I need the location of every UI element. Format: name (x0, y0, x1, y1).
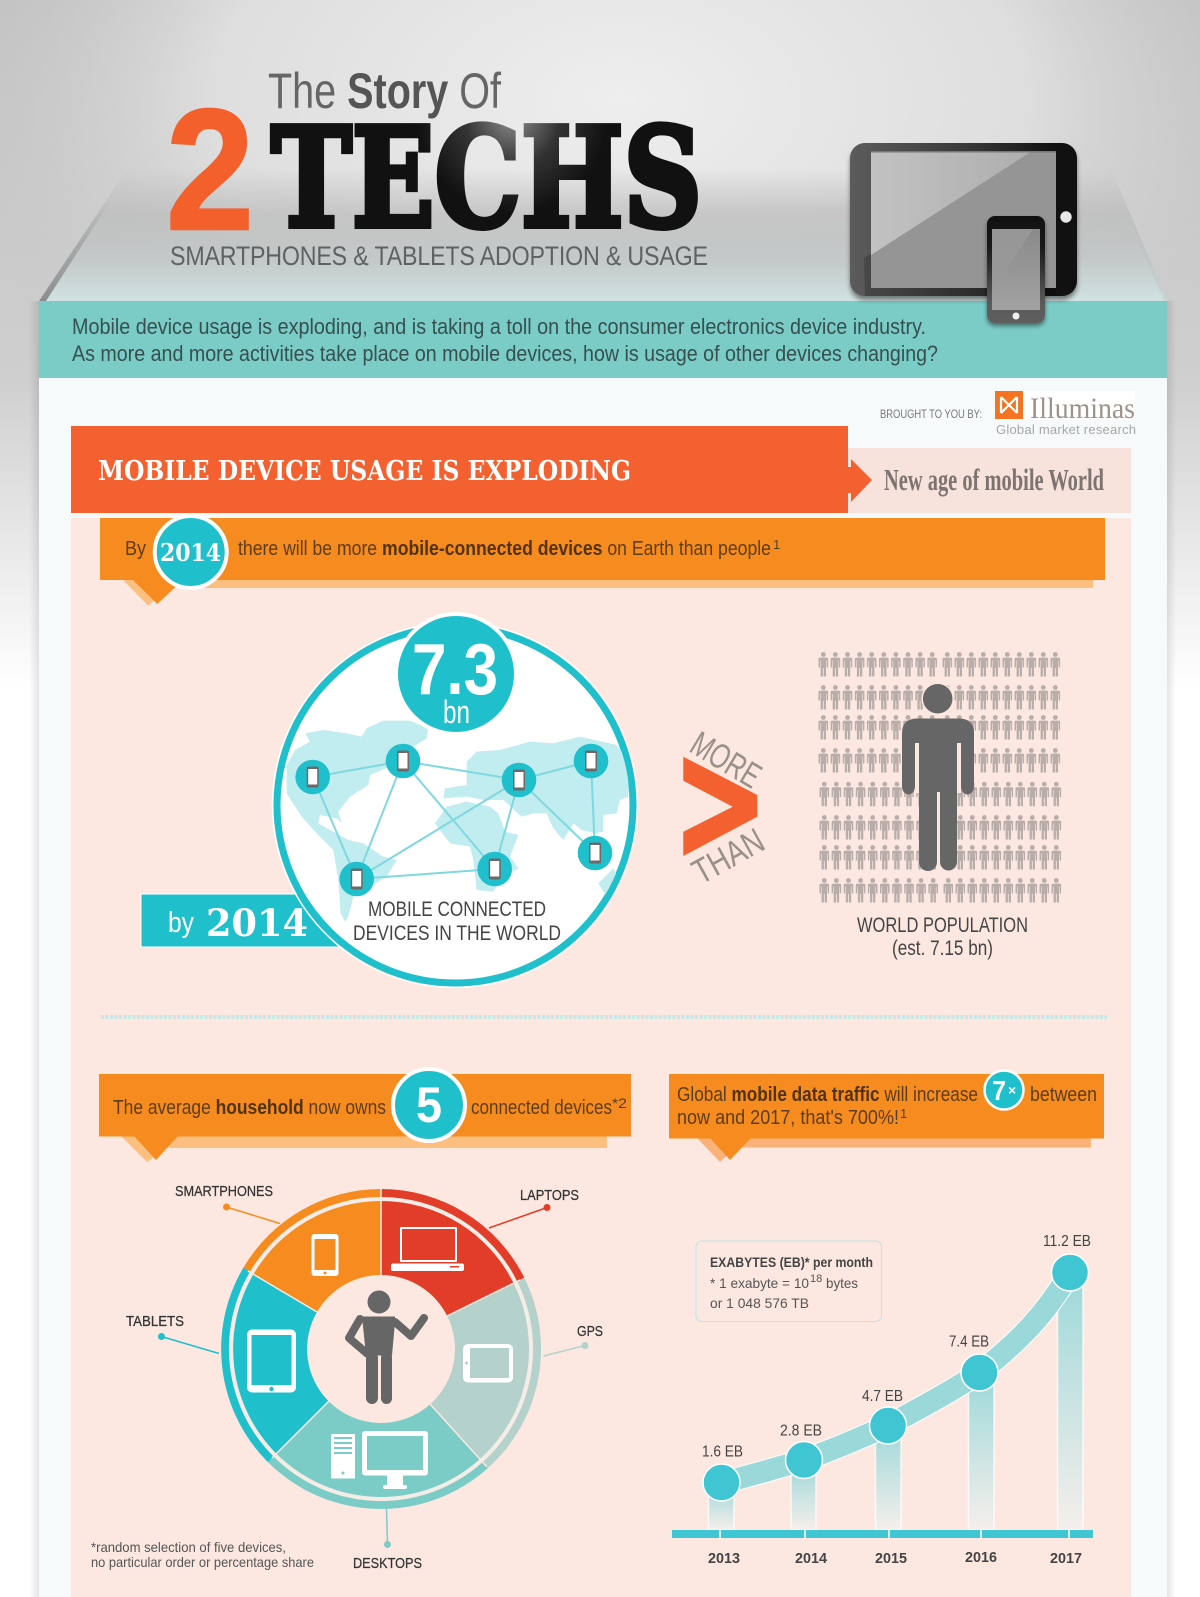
badge: 7.3 bn: bn (443, 694, 470, 730)
callout: household devices (99, 1069, 631, 1162)
world population pictogram: WORLD POPULATION (857, 914, 1028, 937)
numeral 2: 2 (166, 74, 254, 266)
sponsor credit: BROUGHT TO YOU BY: (880, 407, 982, 421)
exabytes legend: * 1 exabyte = 10 (710, 1275, 809, 1291)
callout: mobile data traffic: between (1030, 1084, 1097, 1106)
exabytes legend: 18 (810, 1273, 822, 1285)
value labels: 7.4 EB (949, 1334, 989, 1350)
year labels: 2017 (1050, 1550, 1082, 1567)
callout: mobile data traffic (669, 1070, 1104, 1162)
exabytes legend: or 1 048 576 TB (710, 1295, 809, 1311)
badge: 7x (984, 1070, 1024, 1110)
callout: 2014 devices: 1 (773, 537, 780, 552)
axis (672, 1530, 1093, 1538)
donut labels (126, 1183, 603, 1572)
roof header shape (39, 168, 1167, 301)
comparison: more than: THAN (686, 821, 771, 892)
icon: tablet (247, 1330, 296, 1392)
segment: desktops (268, 1401, 488, 1509)
value labels: 1.6 EB (702, 1444, 743, 1460)
callout: mobile data traffic: 1 (900, 1106, 907, 1121)
badge: 7.3 bn (396, 614, 516, 734)
icon: laptop (391, 1227, 464, 1271)
comparison: more than (683, 724, 771, 892)
title line: The Story Of: The Story Of (268, 63, 501, 119)
label: by 2014: by (168, 907, 194, 939)
label: smartphones: SMARTPHONES (175, 1183, 273, 1200)
globe: mobile connected devices: MOBILE CONNECTED (368, 898, 546, 921)
segment: tablets (221, 1268, 329, 1462)
exabytes legend: EXABYTES (EB)* per month (710, 1254, 873, 1270)
label: desktops (353, 1509, 422, 1572)
callout: mobile data traffic: Global mobile data traffic will increase (677, 1084, 978, 1106)
value labels: 11.2 EB (1043, 1233, 1091, 1250)
main white panel (39, 378, 1167, 1597)
network lines (313, 761, 595, 879)
callout: 2014 devices: By (125, 538, 146, 560)
exabytes legend: bytes (826, 1275, 858, 1291)
label: tablets (126, 1313, 219, 1354)
segment: laptops (381, 1189, 524, 1316)
badge: 7x: × (1008, 1082, 1016, 1098)
callout: 2014 devices (100, 516, 1105, 606)
logo: Illuminas: Illuminas (1030, 392, 1135, 425)
section heading: MOBILE DEVICE USAGE IS EXPLODING (98, 456, 631, 487)
icon: smartphone (312, 1234, 338, 1276)
label: by 2014 (141, 894, 381, 947)
badge: 2014 (155, 516, 227, 588)
badge: 5 (393, 1069, 465, 1141)
badge: 7.3 bn: 7.3 (412, 630, 498, 710)
world map (287, 721, 628, 922)
year labels: 2014 (795, 1550, 828, 1567)
subtitle: SMARTPHONES & TABLETS ADOPTION & USAGE (170, 241, 708, 271)
label: desktops: DESKTOPS (353, 1555, 422, 1572)
exabytes legend (696, 1241, 882, 1322)
world population pictogram (818, 652, 1061, 960)
badge: 5: 5 (416, 1077, 442, 1133)
area chart: mobile data traffic (672, 1233, 1093, 1567)
badge: 2014: 2014 (160, 538, 221, 567)
label: smartphones (175, 1183, 280, 1224)
label: laptops: LAPTOPS (520, 1187, 579, 1204)
footnote: no particular order or percentage share (91, 1554, 314, 1570)
trend curve (722, 1272, 1070, 1483)
label: tablets: TABLETS (126, 1313, 184, 1330)
callout: mobile data traffic: now and 2017, that's 700%! (677, 1107, 899, 1129)
intro band (39, 301, 1167, 378)
label: GPS: GPS (577, 1323, 603, 1340)
value labels: 4.7 EB (862, 1388, 903, 1405)
callout: 2014 devices: there will be more mobile-connected devices on Earth than people (238, 538, 771, 560)
segment: smartphones (243, 1189, 381, 1312)
donut chart: five devices (221, 1189, 541, 1509)
label: laptops (489, 1187, 579, 1228)
value labels (702, 1233, 1091, 1460)
logo: Illuminas (995, 391, 1136, 437)
word TECHS: TECHS (271, 98, 702, 259)
year labels: 2015 (875, 1550, 907, 1567)
callout: household devices: The average household now owns (113, 1097, 386, 1119)
footnote: *random selection of five devices, (91, 1539, 286, 1555)
intro band: As more and more activities take place on mobile devices, how is usage of other devices changing? (72, 341, 938, 366)
sponsor credit (880, 391, 1136, 437)
arrow (848, 459, 872, 502)
pink content panel (71, 518, 1131, 1597)
globe: mobile connected devices (272, 614, 638, 988)
badge: 7x: 7 (992, 1075, 1006, 1106)
world population pictogram: (est. 7.15 bn) (892, 937, 993, 960)
year labels: 2016 (965, 1549, 997, 1566)
icon: central person (349, 1290, 424, 1404)
data points (703, 1254, 1088, 1501)
globe: mobile connected devices: DEVICES IN THE WORLD (353, 922, 561, 945)
large person (902, 683, 974, 871)
icon: desktop computer (331, 1431, 428, 1489)
callout: household devices: *2 (612, 1095, 627, 1111)
year labels (708, 1549, 1082, 1567)
label: by 2014: 2014 (206, 901, 308, 945)
label: GPS (544, 1323, 603, 1356)
intro band: Mobile device usage is exploding, and is taking a toll on the consumer electronics device industry. (72, 314, 926, 339)
callout: household devices: connected devices (471, 1097, 612, 1119)
year labels: 2013 (708, 1550, 740, 1567)
device nodes (295, 744, 612, 896)
icon: GPS (463, 1344, 513, 1382)
value labels: 2.8 EB (780, 1422, 822, 1440)
comparison: more than: MORE (684, 724, 768, 796)
bars (708, 1273, 1083, 1530)
footnote (91, 1539, 314, 1570)
icon: tablet and smartphone (850, 143, 1077, 326)
section heading (71, 426, 1131, 513)
logo: Illuminas: Global market research (996, 422, 1136, 437)
title (166, 63, 708, 271)
segment: GPS (430, 1278, 541, 1468)
